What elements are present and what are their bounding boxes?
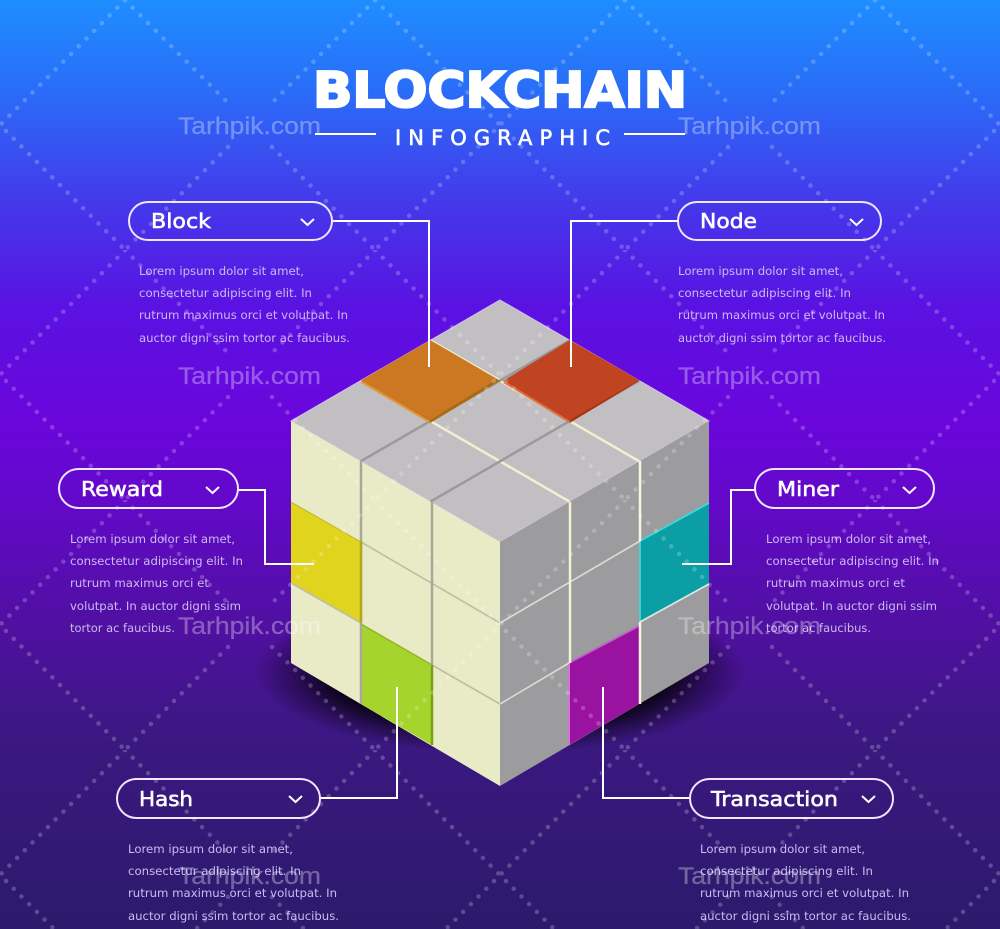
title: BLOCKCHAIN bbox=[313, 62, 687, 119]
subtitle with side rules: INFOGRAPHIC bbox=[395, 126, 610, 150]
watermark text: Tarhpik.com bbox=[678, 113, 821, 140]
label pill: Reward bbox=[59, 469, 238, 508]
watermark text: Tarhpik.com bbox=[178, 613, 321, 640]
green tile bbox=[361, 624, 432, 745]
teal tile bbox=[640, 503, 709, 622]
text block: Hash bbox=[128, 842, 339, 923]
label pill: Miner bbox=[755, 469, 934, 508]
text block: Transaction: auctor digni ssim tortor ac faucibus. bbox=[700, 909, 911, 923]
label pill: Transaction bbox=[690, 779, 893, 818]
connector: Transaction bbox=[603, 687, 690, 798]
text block: Block: consectetur adipiscing elit. In bbox=[139, 286, 312, 300]
text block: Node: consectetur adipiscing elit. In bbox=[678, 286, 851, 300]
text block: Miner: consectetur adipiscing elit. In bbox=[766, 554, 939, 568]
text block: Miner bbox=[766, 532, 939, 635]
connector: Block bbox=[332, 221, 429, 367]
left face bbox=[291, 421, 500, 786]
text block: Reward: rutrum maximus orci et bbox=[70, 576, 209, 590]
text block: Block: rutrum maximus orci et volutpat. In bbox=[139, 308, 348, 322]
text block: Block: Lorem ipsum dolor sit amet, bbox=[139, 264, 304, 278]
watermark text: Tarhpik.com bbox=[678, 863, 821, 890]
text block: Block bbox=[139, 264, 350, 345]
label pill: Miner: Miner bbox=[777, 477, 840, 501]
text block: Miner: tortor ac faucibus. bbox=[766, 621, 871, 635]
text block: Transaction: rutrum maximus orci et volutpat. In bbox=[700, 886, 909, 900]
text block: Miner: rutrum maximus orci et bbox=[766, 576, 905, 590]
text block: Reward: volutpat. In auctor digni ssim bbox=[70, 599, 241, 613]
text block: Miner: volutpat. In auctor digni ssim bbox=[766, 599, 937, 613]
label pill: Block bbox=[129, 202, 332, 240]
watermark text bbox=[178, 113, 821, 890]
label pill: Node: Node bbox=[700, 209, 757, 233]
isometric block cube bbox=[291, 300, 709, 786]
watermark text: Tarhpik.com bbox=[178, 363, 321, 390]
text block: Transaction: Lorem ipsum dolor sit amet, bbox=[700, 842, 865, 856]
text block: Hash: Lorem ipsum dolor sit amet, bbox=[128, 842, 293, 856]
yellow tile bbox=[291, 502, 361, 623]
text block: Transaction: consectetur adipiscing elit. In bbox=[700, 864, 873, 878]
orange tile bbox=[361, 340, 500, 423]
label pill: Reward: Reward bbox=[81, 477, 163, 501]
connector: Reward bbox=[238, 490, 314, 564]
text block: Reward bbox=[70, 532, 243, 635]
text block: Reward: consectetur adipiscing elit. In bbox=[70, 554, 243, 568]
text block: Transaction bbox=[700, 842, 911, 923]
red tile bbox=[503, 340, 639, 423]
label pill: Block: Block bbox=[151, 209, 211, 233]
text block: Node bbox=[678, 264, 886, 345]
text block: Reward: Lorem ipsum dolor sit amet, bbox=[70, 532, 235, 546]
right face bbox=[500, 421, 709, 786]
connector: Miner bbox=[682, 490, 755, 564]
watermark text: Tarhpik.com bbox=[178, 113, 321, 140]
top face bbox=[291, 300, 709, 542]
text block: Miner: Lorem ipsum dolor sit amet, bbox=[766, 532, 931, 546]
text block: Node: rutrum maximus orci et volutpat. In bbox=[678, 308, 885, 322]
label pill: Node bbox=[678, 202, 881, 240]
purple tile bbox=[569, 626, 639, 745]
cube ground shadow bbox=[255, 590, 745, 754]
text block: Block: auctor digni ssim tortor ac faucibus. bbox=[139, 331, 350, 345]
label pill: Hash: Hash bbox=[139, 787, 193, 811]
text block: Hash: rutrum maximus orci et volutpat. In bbox=[128, 886, 337, 900]
watermark text: Tarhpik.com bbox=[678, 363, 821, 390]
watermark text: Tarhpik.com bbox=[178, 863, 321, 890]
text block: Reward: tortor ac faucibus. bbox=[70, 621, 175, 635]
watermark text: Tarhpik.com bbox=[678, 613, 821, 640]
text block: Hash: auctor digni ssim tortor ac faucibus. bbox=[128, 909, 339, 923]
label pill: Hash bbox=[117, 779, 320, 818]
connector: Hash bbox=[320, 687, 397, 798]
text block: Node: auctor digni ssim tortor ac faucibus. bbox=[678, 331, 886, 345]
label pill: Transaction: Transaction bbox=[710, 787, 838, 811]
text block: Node: Lorem ipsum dolor sit amet, bbox=[678, 264, 843, 278]
text block: Hash: consectetur adipiscing elit. In bbox=[128, 864, 301, 878]
connector: Node bbox=[571, 221, 678, 367]
